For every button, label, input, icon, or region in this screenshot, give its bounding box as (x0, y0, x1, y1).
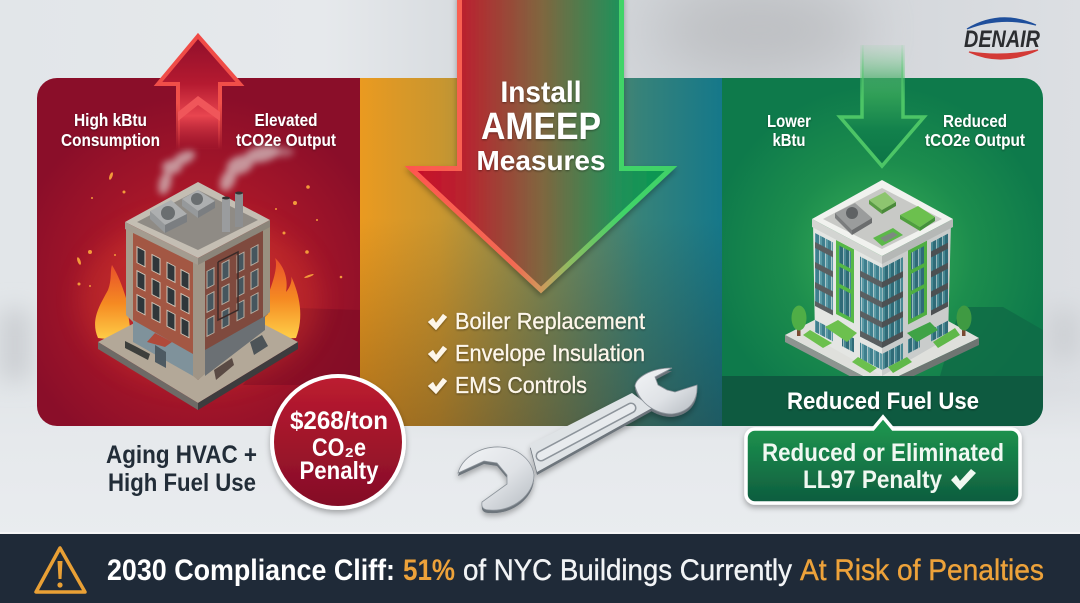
icon: wrench (458, 368, 697, 513)
label: reduced tco2e output: tCO2e Output (925, 130, 1025, 150)
hvac units (150, 200, 187, 225)
door and awning (147, 333, 172, 368)
glazing right (882, 230, 948, 370)
flames (95, 258, 300, 342)
plaza (785, 320, 979, 376)
callout: $268 per ton penalty: $268/ton (290, 407, 388, 435)
arrow: red up arrow (158, 36, 240, 150)
headline: compliance cliff (107, 554, 1044, 587)
roof (812, 180, 953, 256)
rooftop units (835, 203, 872, 230)
label: elevated tco2e output (236, 110, 336, 150)
smoke (156, 142, 294, 196)
label: high kbtu consumption: High kBtu (74, 110, 147, 130)
fire escape (218, 252, 238, 320)
left facade (813, 228, 882, 320)
item: boiler replacement: Boiler Replacement (455, 308, 646, 334)
item: envelope insulation: Envelope Insulation (455, 340, 645, 366)
glow and embers (76, 172, 342, 385)
callout: reduced or eliminated LL97 penalty: LL97 Penalty (803, 466, 942, 494)
logo: denair (964, 18, 1041, 59)
label: elevated tco2e output: Elevated (254, 110, 318, 130)
windows right (207, 245, 258, 336)
headline: compliance cliff: 2030 Compliance Cliff: (107, 554, 395, 587)
label: elevated tco2e output: tCO2e Output (236, 130, 336, 150)
label: lower kbtu (767, 111, 811, 150)
title: install AMEEP measures (476, 76, 606, 176)
label: lower kbtu: kBtu (772, 130, 806, 150)
checklist (428, 308, 646, 398)
roof (125, 182, 270, 258)
label: reduced tco2e output (925, 111, 1025, 150)
callout: $268 per ton penalty (272, 376, 404, 508)
label: lower kbtu: Lower (767, 111, 811, 131)
glazing left (815, 229, 882, 370)
storefront right (205, 316, 265, 376)
logo: denair: DENAIR (964, 26, 1041, 53)
label: high kbtu consumption (61, 110, 160, 150)
icon: efficient green building (785, 180, 979, 392)
label: reduced tco2e output: Reduced (943, 111, 1007, 131)
left brick wall (128, 226, 198, 380)
panel: red current state (37, 78, 360, 426)
windows left (137, 247, 189, 338)
arrow: green down arrow (840, 45, 924, 166)
callout: reduced or eliminated LL97 penalty (746, 417, 1020, 503)
trees (792, 306, 972, 336)
icon: aging brick building on fire (76, 142, 342, 410)
wrench depth layer (458, 371, 697, 513)
text: aging HVAC and high fuel use: High Fuel Use (108, 469, 256, 497)
right facade (882, 222, 951, 376)
icon: warning triangle (36, 548, 85, 592)
headline: compliance cliff: At Risk of Penalties (800, 554, 1044, 587)
headline: compliance cliff: of NYC Buildings Currently (463, 554, 792, 587)
bins and utility boxes (125, 335, 268, 380)
label: high kbtu consumption: Consumption (61, 130, 160, 150)
callout: $268 per ton penalty: Penalty (300, 457, 379, 485)
panel: three-stage band (37, 78, 1043, 426)
panel: green future state (722, 78, 1043, 426)
headline: compliance cliff: 51% (403, 554, 455, 587)
arrow: install AMEEP central arrow (411, 0, 671, 290)
title: install AMEEP measures: Measures (476, 145, 606, 176)
callout: $268 per ton penalty: CO₂e (312, 434, 366, 462)
item: EMS controls: EMS Controls (455, 372, 587, 398)
footer banner (0, 532, 1080, 603)
title: install AMEEP measures: Install (500, 76, 582, 109)
awnings and planters (803, 320, 960, 373)
title: install AMEEP measures: AMEEP (481, 106, 601, 148)
text: aging HVAC and high fuel use: Aging HVAC + (106, 441, 257, 469)
chimneys (222, 198, 230, 232)
right brick wall (198, 226, 268, 380)
icon: check mark (951, 469, 976, 490)
text: aging HVAC and high fuel use (106, 441, 257, 497)
callout: reduced or eliminated LL97 penalty: Reduced or Eliminated (762, 439, 1004, 467)
text: reduced fuel use: Reduced Fuel Use (787, 388, 979, 415)
storefront left (133, 320, 193, 376)
panel: orange to teal transition (360, 78, 722, 426)
ground plinth (98, 290, 298, 403)
corner quoins (126, 224, 133, 322)
